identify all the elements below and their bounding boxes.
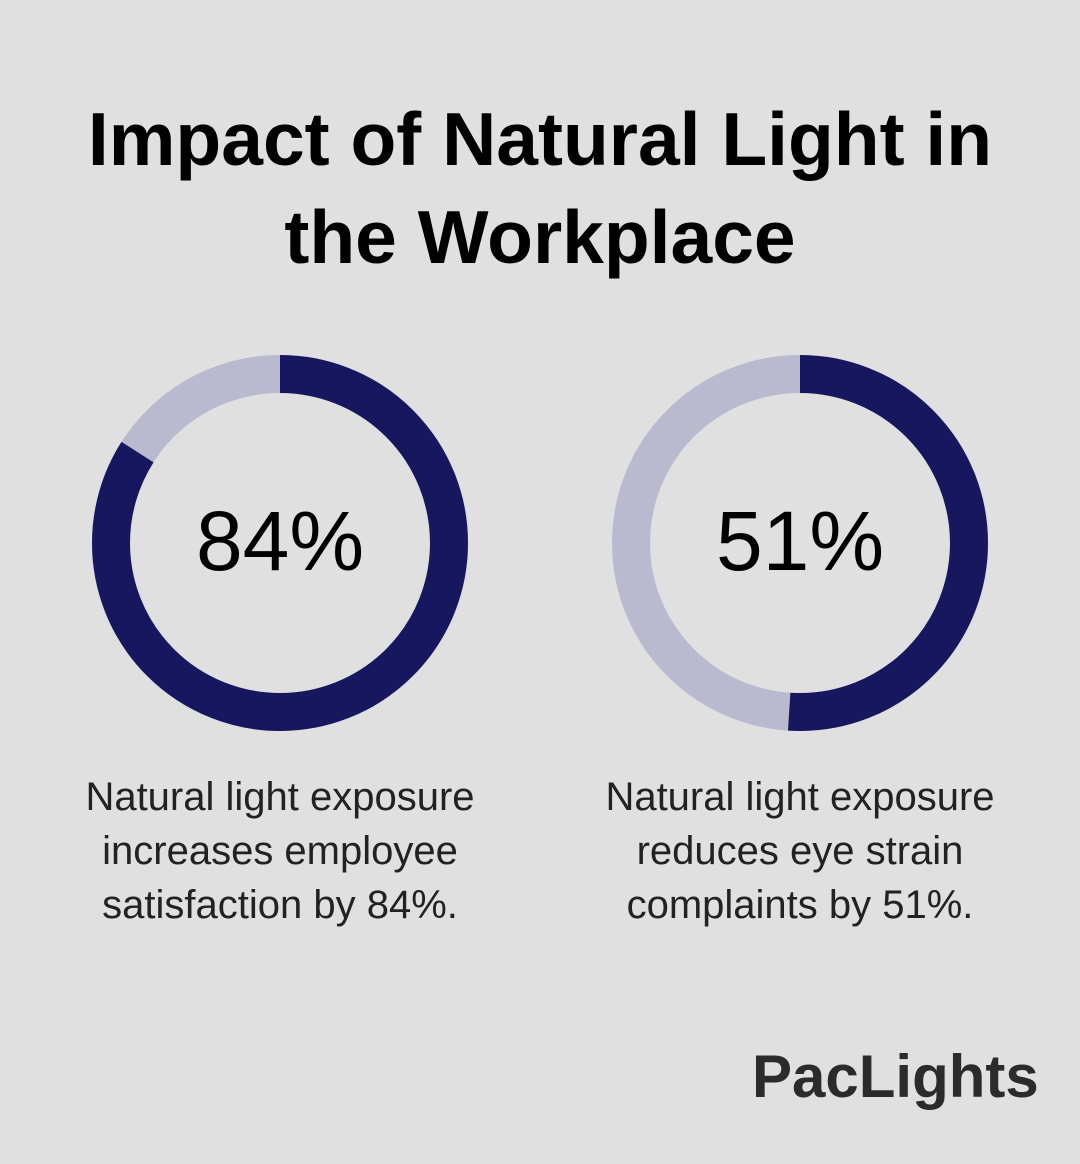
donut: 51% [631,374,969,712]
donut: 84% [111,374,449,712]
title: Impact of Natural Light in [88,97,992,181]
title: the Workplace [284,195,796,279]
donut: 51%: 51% [716,494,884,588]
caption: 51%: Natural light exposure reduces eye strain complaints by 51%. [605,775,995,927]
title [88,97,992,279]
caption: 84%: Natural light exposure increases employee satisfaction by 84%. [85,775,475,927]
donut: 84%: 84% [196,494,364,588]
logo: PacLights [752,1043,1039,1110]
